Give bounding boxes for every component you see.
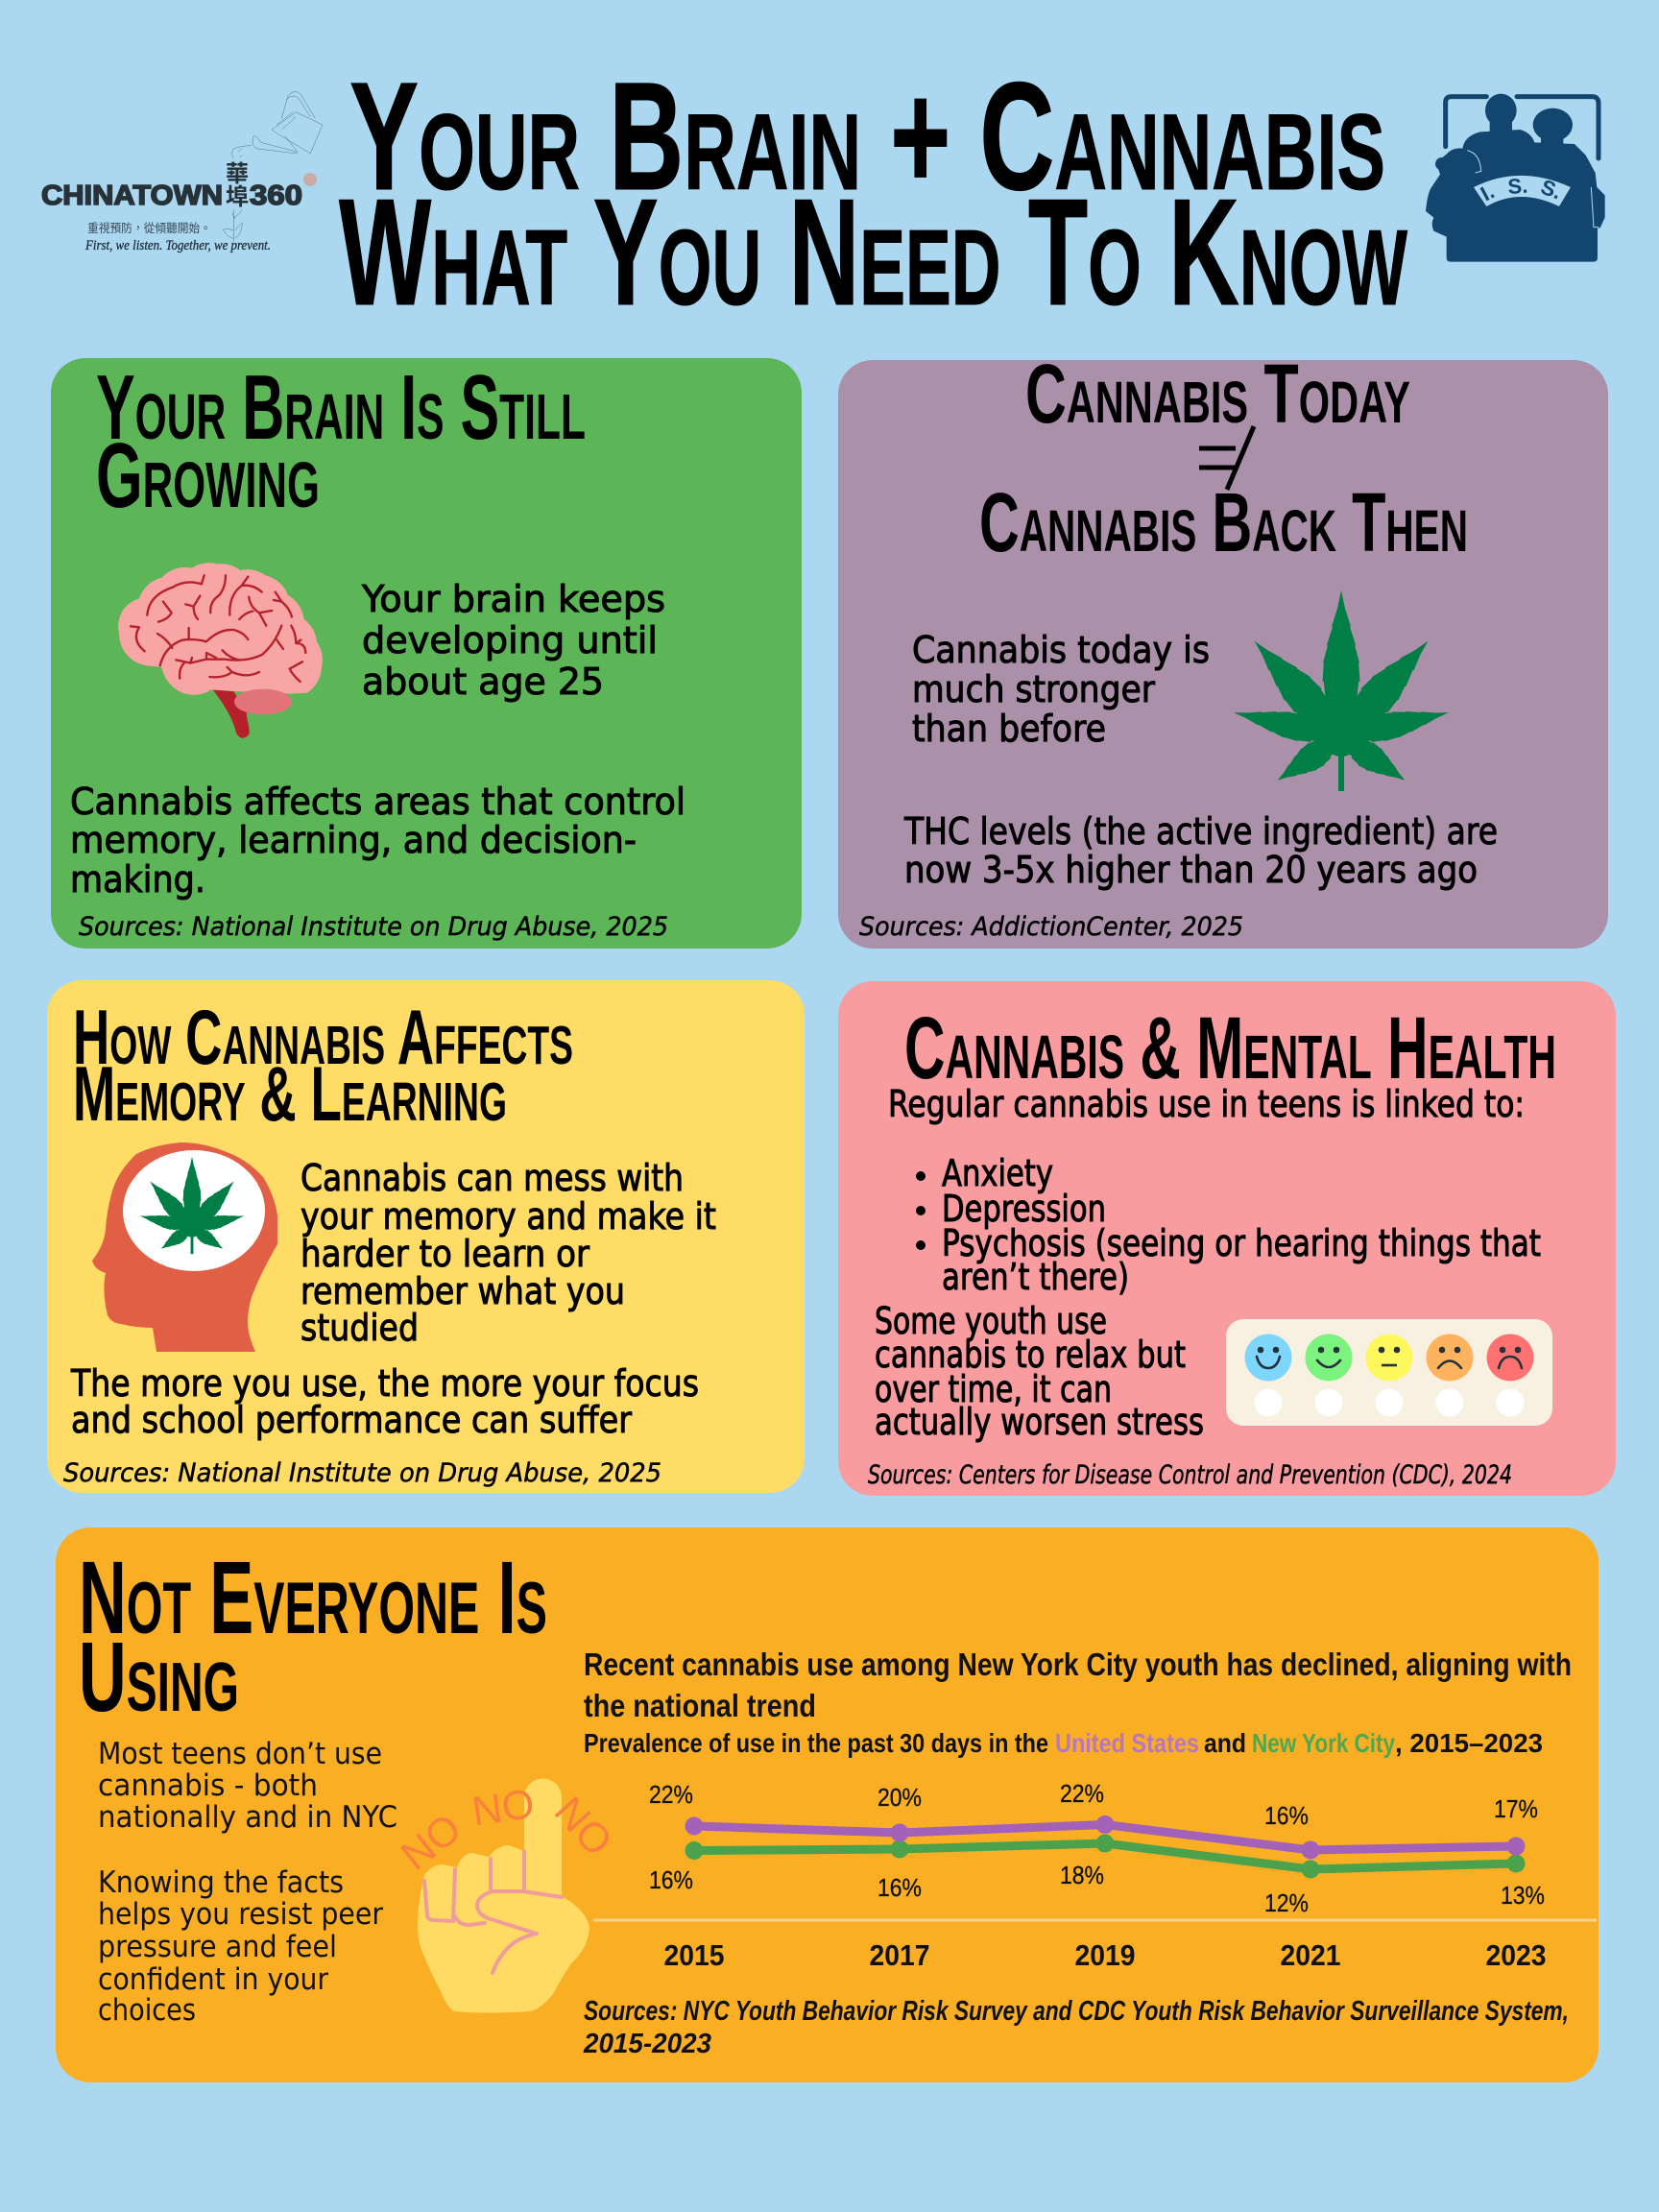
labels: New York City values: 16%: [649, 1865, 693, 1894]
bullet list: aren’t there): [942, 1256, 1129, 1298]
text: most teens: nationally and in NYC: [98, 1800, 397, 1835]
face: happy: [1306, 1334, 1352, 1381]
heading: [96, 356, 586, 527]
bullet list: Anxiety: [942, 1152, 1053, 1194]
icon: hand with finger raised saying no: NO: [545, 1789, 621, 1865]
bullet list: Depression: [942, 1188, 1106, 1230]
chart subtitle: [584, 1728, 1543, 1758]
text: THC levels: [903, 810, 1498, 891]
labels: United States values: 16%: [1264, 1801, 1309, 1830]
logo wordmark: 華: [226, 161, 249, 187]
icon: cannabis leaf: [1231, 590, 1452, 792]
heading: Using: [79, 1622, 239, 1732]
icon: hand with finger raised saying no: [393, 1778, 621, 2012]
chart subtitle: and: [1204, 1728, 1246, 1758]
source note: 2015-2023: [583, 2029, 711, 2059]
text: most teens: [98, 1737, 397, 1835]
text: stronger: much stronger: [912, 668, 1155, 710]
labels: New York City values: 16%: [878, 1873, 922, 1902]
text: intro: Regular cannabis use in teens is linked to:: [888, 1083, 1525, 1125]
heading: Not Everyone Is: [79, 1539, 547, 1655]
text: most teens: cannabis - both: [98, 1768, 318, 1803]
text: knowing the facts: Knowing the facts: [98, 1865, 344, 1900]
logo: Chinatown 360: [41, 91, 323, 253]
labels: New York City values: 12%: [1264, 1888, 1309, 1917]
series: New York City: [685, 1834, 1525, 1878]
heading: Your Brain Is Still: [96, 356, 586, 459]
icon: watering can: [223, 91, 323, 242]
text: stronger: Cannabis today is: [912, 629, 1210, 671]
heading: [73, 995, 573, 1138]
logo wordmark: CHINATOWN: [41, 180, 223, 211]
icon: hand with finger raised saying no: NO: [393, 1805, 470, 1880]
text: stress: cannabis to relax but: [875, 1334, 1186, 1376]
icon: brain: [118, 563, 323, 738]
text: knowing the facts: choices: [98, 1993, 196, 2028]
heading: Growing: [96, 424, 320, 527]
logo tagline: First, we listen. Together, we prevent.: [84, 238, 271, 253]
text: THC levels: THC levels (the active ingredient) are: [903, 810, 1498, 853]
labels: years: 2019: [1075, 1938, 1135, 1972]
title: [339, 50, 1407, 337]
chart subtitle: United States: [1055, 1728, 1199, 1758]
text: brain development: [361, 578, 665, 703]
text: focus: The more you use, the more your focus: [70, 1362, 699, 1405]
chart heading: the national trend: [584, 1688, 816, 1723]
text: memory: remember what you: [301, 1270, 625, 1312]
labels: United States values: 22%: [1060, 1779, 1104, 1808]
labels: years: 2015: [664, 1938, 724, 1972]
text: memory: Cannabis can mess with: [301, 1157, 684, 1199]
answer dots: [1254, 1388, 1525, 1417]
panel: cannabis today vs back then: [838, 348, 1608, 949]
text: areas affected: [70, 781, 685, 901]
text: memory: studied: [301, 1307, 419, 1349]
line chart: [593, 1779, 1597, 1972]
chart subtitle: , 2015–2023: [1395, 1728, 1543, 1758]
text: stress: over time, it can: [875, 1368, 1112, 1410]
text: areas affected: Cannabis affects areas that control: [70, 781, 685, 823]
chart subtitle: Prevalence of use in the past 30 days in the: [584, 1728, 1048, 1758]
text: memory: harder to learn or: [301, 1233, 589, 1275]
text: focus: and school performance can suffer: [71, 1399, 632, 1441]
text: most teens: Most teens don’t use: [98, 1737, 382, 1771]
heading: [979, 348, 1468, 569]
chart subtitle: New York City: [1252, 1728, 1395, 1758]
text: stress: Some youth use: [875, 1300, 1107, 1342]
text: brain development: Your brain keeps: [361, 578, 665, 620]
chart heading: [584, 1647, 1572, 1723]
heading: How Cannabis Affects: [73, 995, 573, 1081]
panel: memory and learning: [47, 980, 805, 1493]
logo: I.S.S.: I.: [1477, 180, 1498, 205]
logo tagline: 重視預防，從傾聽開始。: [87, 221, 211, 235]
mood scale card: [1226, 1319, 1552, 1426]
text: areas affected: making.: [70, 858, 205, 901]
labels: New York City values: 13%: [1501, 1881, 1545, 1910]
labels: years: 2021: [1281, 1938, 1340, 1972]
logo: I.S.S.: S.: [1538, 175, 1565, 204]
labels: New York City values: 18%: [1060, 1861, 1104, 1889]
source note: Sources: National Institute on Drug Abuse, 2025: [63, 1458, 661, 1488]
labels: United States values: [649, 1779, 1538, 1830]
logo wordmark: 埠: [226, 184, 249, 210]
labels: United States values: 17%: [1494, 1794, 1538, 1823]
labels: New York City values: [649, 1861, 1545, 1917]
panel: not everyone is using: [56, 1527, 1599, 2082]
heading: Memory & Learning: [73, 1051, 507, 1138]
text: knowing the facts: pressure and feel: [98, 1930, 337, 1964]
labels: United States values: 22%: [649, 1780, 693, 1809]
logo wordmark: 360: [250, 180, 302, 211]
text: knowing the facts: [98, 1865, 383, 2028]
text: memory: your memory and make it: [301, 1195, 716, 1238]
labels: years: 2017: [870, 1938, 929, 1972]
source note: Sources: National Institute on Drug Abuse, 2025: [79, 912, 668, 942]
labels: United States values: 20%: [878, 1783, 922, 1812]
text: stronger: [912, 629, 1210, 750]
heading: [79, 1539, 547, 1732]
not-equal sign: [1199, 426, 1254, 490]
source note: Sources: AddictionCenter, 2025: [859, 912, 1243, 942]
text: focus: [70, 1362, 699, 1441]
source note: [583, 1996, 1569, 2059]
text: knowing the facts: helps you resist peer: [98, 1897, 383, 1932]
logo tagline: [84, 221, 271, 253]
text: stress: actually worsen stress: [875, 1401, 1204, 1443]
face: sad: [1427, 1334, 1473, 1381]
icon: hand with finger raised saying no: NO: [469, 1781, 537, 1835]
logo: I.S.S.: S.: [1507, 174, 1528, 199]
face: very sad: [1486, 1334, 1534, 1381]
logo badge dot: [303, 173, 317, 186]
text: stress: [875, 1300, 1204, 1443]
logo: I.S.S.: [1426, 94, 1605, 262]
text: brain development: about age 25: [362, 661, 604, 703]
panel: mental health: [838, 981, 1616, 1496]
panel: your brain is still growing: [51, 356, 802, 949]
text: THC levels: now 3-5x higher than 20 years ago: [904, 849, 1478, 891]
text: areas affected: memory, learning, and decision-: [70, 819, 637, 861]
text: memory: [301, 1157, 716, 1349]
text: stronger: than before: [912, 708, 1106, 750]
heading: Cannabis Today: [1025, 348, 1410, 441]
labels: years: [664, 1938, 1546, 1972]
bullet list: [916, 1152, 1541, 1298]
series: United States: [685, 1815, 1525, 1859]
logo wordmark: [41, 161, 302, 211]
text: knowing the facts: confident in your: [98, 1962, 328, 1997]
face: neutral: [1365, 1334, 1413, 1381]
labels: years: 2023: [1486, 1938, 1546, 1972]
text: brain development: developing until: [362, 619, 658, 661]
bullet list: Psychosis (seeing or hearing things that: [942, 1222, 1541, 1264]
icon: head with leaf: [92, 1142, 277, 1352]
face: very happy: [1244, 1334, 1292, 1381]
axis: [593, 1918, 1597, 1922]
